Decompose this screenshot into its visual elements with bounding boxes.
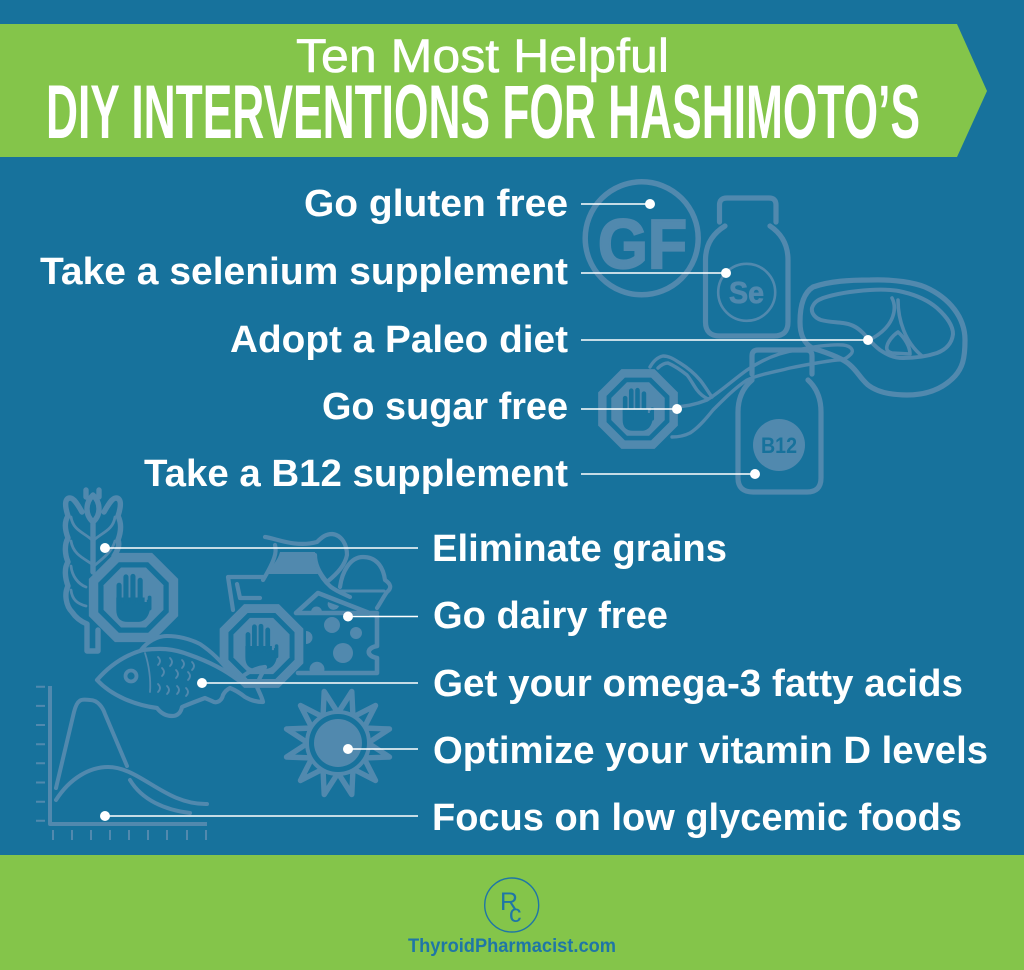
logo: c (509, 900, 522, 928)
icon: stop sign over wheat (94, 558, 173, 637)
item: go dairy free: Go dairy free (433, 595, 668, 637)
icon: wheat (65, 490, 121, 651)
icon: dairy jug, glass and ice cream (228, 534, 390, 610)
item: omega-3 (197, 663, 963, 705)
item: vitamin d: Optimize your vitamin D levels (433, 730, 988, 772)
icon: stop sign over dairy (224, 609, 299, 683)
icon: meat steak (800, 280, 965, 395)
item: go sugar free: Go sugar free (322, 386, 568, 428)
item: go gluten free: Go gluten free (304, 183, 568, 225)
item: omega-3: Get your omega-3 fatty acids (433, 663, 963, 705)
item: eliminate grains: Eliminate grains (432, 528, 727, 570)
icon: sun (286, 692, 390, 794)
icon: gluten free badge (585, 182, 698, 295)
item: go sugar free (322, 386, 682, 428)
icon: selenium bottle (706, 198, 788, 336)
item: adopt a paleo diet: Adopt a Paleo diet (230, 319, 568, 361)
icon: gluten free badge: GF (598, 205, 687, 283)
icon: glycemic chart (36, 686, 207, 840)
item: take a b12 supplement: Take a B12 supplement (144, 453, 568, 495)
icon: selenium bottle: Se (729, 275, 764, 310)
item: eliminate grains (100, 528, 727, 570)
website url: ThyroidPharmacist.com (408, 936, 616, 957)
title: line one: Ten Most Helpful (296, 29, 669, 82)
icon: sugar spoon and hand (650, 345, 852, 437)
icon: B12 bottle (738, 350, 821, 492)
logo (485, 878, 539, 932)
item: low glycemic foods (100, 797, 962, 839)
icon: cheese (296, 593, 377, 673)
item: take a b12 supplement (144, 453, 760, 495)
item: low glycemic foods: Focus on low glycemic foods (432, 797, 962, 839)
logo: R (500, 888, 518, 916)
item: take a selenium supplement: Take a selenium supplement (40, 251, 568, 293)
item: adopt a paleo diet (230, 319, 873, 361)
icon: stop sign over sugar (602, 373, 674, 445)
footer band (0, 855, 1024, 970)
icon: B12 bottle: B12 (761, 433, 797, 458)
title banner (0, 24, 987, 157)
icon: fish (97, 636, 265, 716)
